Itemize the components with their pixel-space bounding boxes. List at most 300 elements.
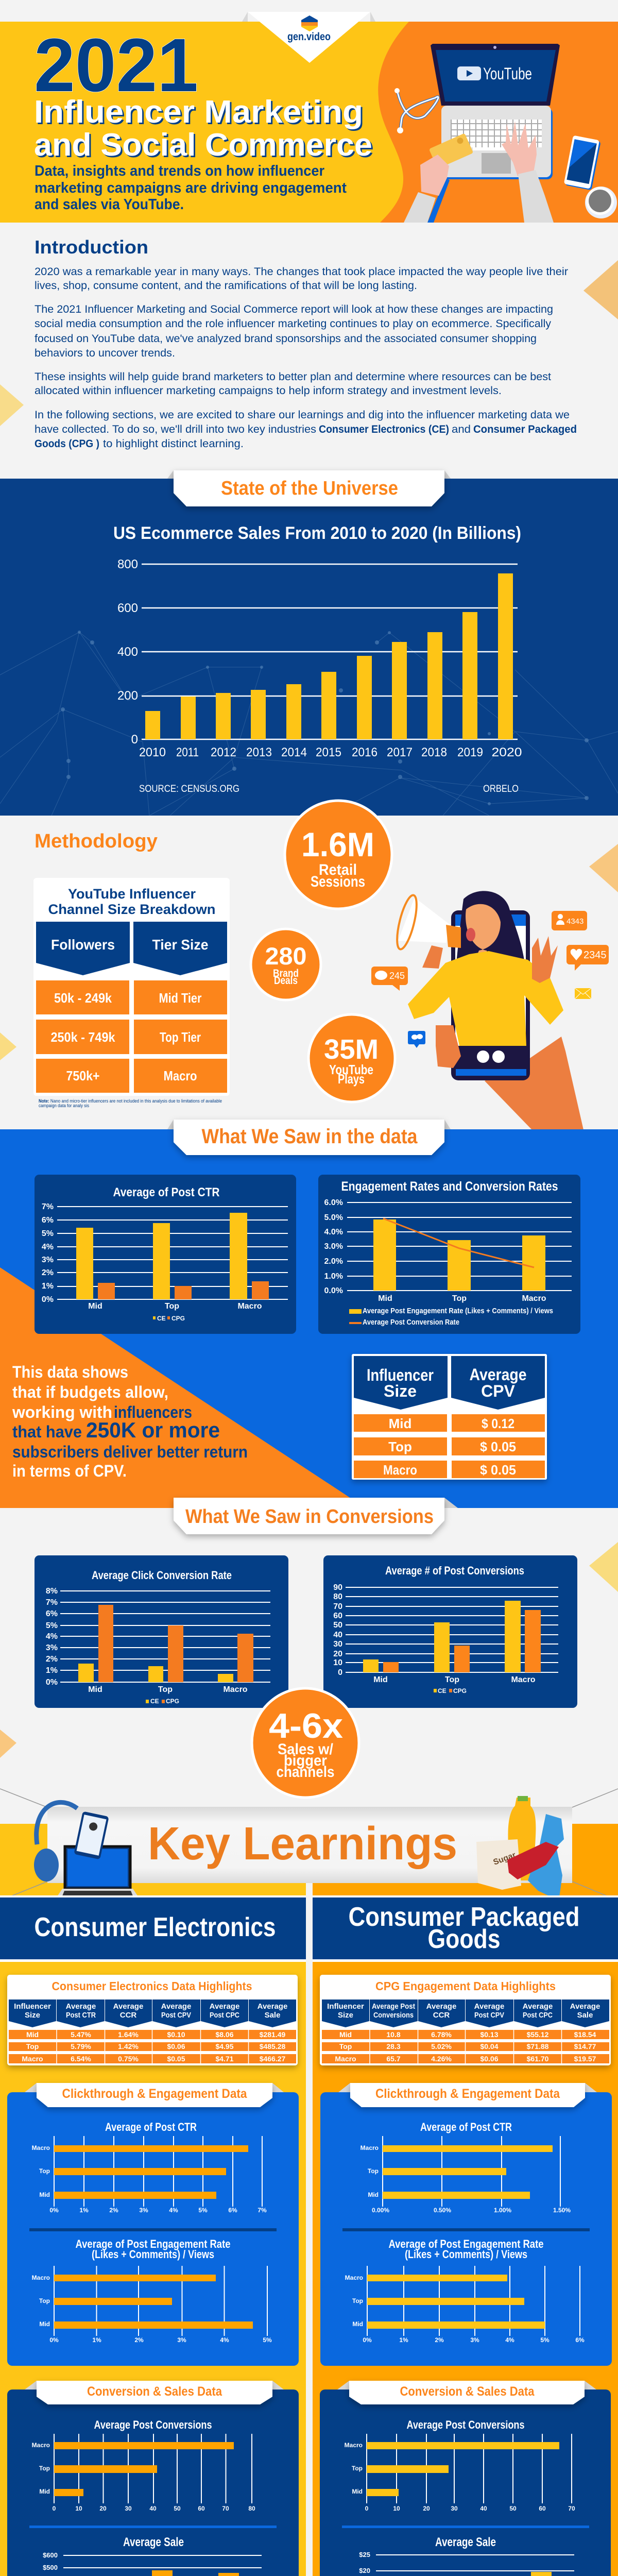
table: consumer electronics data highlights: $0.06 bbox=[167, 2042, 185, 2050]
illustration: laptop with YouTube bbox=[394, 44, 617, 223]
chart: US ecommerce sales: 0 bbox=[131, 733, 138, 747]
callout: this data shows: working with bbox=[12, 1403, 112, 1421]
logo ribbon bbox=[242, 12, 375, 63]
table: channel size breakdown: 250k - 749k bbox=[50, 1029, 115, 1045]
subtitle bbox=[35, 163, 347, 213]
illustration: laptop with YouTube: YouTube bbox=[483, 64, 532, 83]
chart: average click conversion rate: 1% bbox=[46, 1666, 58, 1675]
chart: average post conversions: Macro bbox=[32, 2442, 50, 2449]
table: consumer electronics data highlights: $8.06 bbox=[215, 2030, 234, 2039]
section tab: what we saw in conversions bbox=[160, 1498, 458, 1534]
section tab: what we saw in the data bbox=[167, 1120, 451, 1155]
chart: average of post CTR: 1% bbox=[79, 2207, 89, 2214]
title: influencer marketing bbox=[34, 94, 374, 164]
chart: average post conversions: 60 bbox=[539, 2505, 546, 2512]
footnote: Note: Nano and micro-tier influencers are not included in this analysis due to limitations of available bbox=[39, 1098, 222, 1104]
chart: average of post engagement rate: 5% bbox=[540, 2336, 550, 2344]
chart: average of post engagement rate: 0% bbox=[49, 2336, 59, 2344]
callout: this data shows: subscribers deliver better return bbox=[12, 1443, 248, 1461]
icon: 2345 tag: 2345 bbox=[583, 950, 607, 961]
chart: average post conversions bbox=[345, 2418, 575, 2512]
table: average CPV: Mid bbox=[389, 1416, 411, 1431]
chart: engagement and conversion rates: Macro bbox=[522, 1294, 546, 1303]
chart: average click conversion rate: 4% bbox=[46, 1632, 58, 1641]
table: CPG engagement data highlights: CCR bbox=[433, 2011, 450, 2020]
table: consumer electronics data highlights: Post CPV bbox=[161, 2011, 191, 2020]
hero banner bbox=[0, 12, 618, 223]
chart: engagement and conversion rates: 0.0% bbox=[324, 1286, 343, 1295]
callout: this data shows bbox=[12, 1363, 248, 1480]
table: channel size breakdown: Followers bbox=[51, 937, 115, 953]
chart: US ecommerce sales: 2014 bbox=[281, 745, 307, 759]
chart: US ecommerce sales: 800 bbox=[117, 557, 138, 571]
table: consumer electronics data highlights: Sale bbox=[265, 2011, 280, 2020]
intro text: have collected. To do so, we'll drill into two key industries bbox=[35, 423, 316, 435]
chart: average sale: Average Sale bbox=[123, 2535, 184, 2549]
stat: 1.6M retail sessions: Retail bbox=[319, 861, 357, 878]
chart: US ecommerce sales: 2016 bbox=[352, 745, 377, 759]
icon: sleeve left bbox=[404, 192, 436, 223]
chart: engagement and conversion rates: 4.0% bbox=[324, 1228, 343, 1236]
table: average CPV: $ 0.05 bbox=[480, 1462, 516, 1478]
chart: average post conversions: 50 bbox=[509, 2505, 517, 2512]
table: consumer electronics data highlights: $0.05 bbox=[167, 2055, 185, 2063]
chart: average of post CTR: Top bbox=[165, 1302, 179, 1311]
table: channel size breakdown: Channel Size Breakdown bbox=[48, 902, 215, 917]
intro text: to highlight distinct learning. bbox=[103, 438, 244, 450]
stat: 280 brand deals: Brand bbox=[273, 968, 299, 979]
chart: average post conversions: 20 bbox=[423, 2505, 430, 2512]
intro text: allocated within influencer marketing campaigns to help inform strategy and investment levels. bbox=[35, 385, 502, 397]
intro text: The 2021 Influencer Marketing and Social Commerce report will look at how these changes are impacting bbox=[35, 303, 553, 315]
table: consumer electronics data highlights: Post CPC bbox=[210, 2011, 239, 2020]
chart: average of post CTR: CPG bbox=[171, 1315, 185, 1322]
chart: average of post CTR: CE bbox=[157, 1315, 166, 1322]
chart: average of post CTR: 3% bbox=[139, 2207, 148, 2214]
section tab: Clickthrough & Engagement Data bbox=[375, 2087, 560, 2101]
chart: average of post CTR: Mid bbox=[368, 2191, 379, 2198]
chart: average of post engagement rate: Macro bbox=[345, 2274, 363, 2281]
chart: average post conversions: Macro bbox=[511, 1675, 536, 1684]
table: consumer electronics data highlights: Influencer bbox=[14, 2002, 51, 2011]
chart: average post conversions: Mid bbox=[39, 2488, 50, 2495]
chart: average of post CTR: 0.00% bbox=[372, 2207, 389, 2214]
title: influencer marketing: and Social Commerce bbox=[36, 129, 374, 164]
icon: 2345 tag bbox=[566, 945, 609, 971]
chart: US ecommerce sales: 2019 bbox=[457, 745, 483, 759]
chart: average of post engagement rate: Top bbox=[39, 2297, 50, 2304]
table: consumer electronics data highlights: Consumer Electronics Data Highlights bbox=[52, 1979, 252, 1993]
chart: average post conversions: CE bbox=[438, 1687, 447, 1694]
table: CPG engagement data highlights: Conversions bbox=[373, 2011, 414, 2020]
table: consumer electronics data highlights: $4.71 bbox=[215, 2055, 234, 2063]
table: channel size breakdown bbox=[33, 878, 230, 1096]
intro text: behaviors to uncover trends. bbox=[35, 347, 175, 359]
chart: average post conversions: Average # of Post Conversions bbox=[385, 1564, 524, 1577]
table: CPG engagement data highlights: $55.12 bbox=[527, 2030, 549, 2039]
chart: US ecommerce sales: 2013 bbox=[246, 745, 272, 759]
chart: average of post CTR: 7% bbox=[42, 1202, 54, 1211]
chart: average of post CTR: Macro bbox=[237, 1302, 262, 1311]
section tab: what we saw in the data: What We Saw in the data bbox=[202, 1125, 418, 1148]
callout: this data shows: influencers bbox=[114, 1403, 192, 1421]
callout: this data shows: This data shows bbox=[12, 1363, 128, 1381]
table: CPG engagement data highlights: Size bbox=[338, 2011, 353, 2020]
decoration: diamonds bbox=[0, 1542, 618, 1758]
table: consumer electronics data highlights: 0.75% bbox=[118, 2055, 139, 2063]
chart: average post conversions: Mid bbox=[352, 2488, 363, 2495]
callout: this data shows: that have bbox=[12, 1422, 82, 1441]
table: consumer electronics data highlights: $466.27 bbox=[260, 2055, 286, 2063]
chart: average of post CTR: 6% bbox=[228, 2207, 237, 2214]
panel: state of the universe bbox=[0, 470, 618, 816]
chart: engagement and conversion rates: Average Post Conversion Rate bbox=[363, 1318, 459, 1327]
chart: US ecommerce sales: 400 bbox=[117, 645, 138, 659]
table: channel size breakdown: Top Tier bbox=[160, 1029, 201, 1045]
illustration: woman with megaphone in phone bbox=[371, 891, 609, 1130]
chart: average of post CTR: Average of Post CTR bbox=[420, 2121, 512, 2133]
panel: introduction bbox=[35, 236, 577, 450]
chart: average post conversions: 80 bbox=[248, 2505, 255, 2512]
chart: average of post CTR bbox=[32, 2121, 267, 2214]
chart: average post conversions: 90 bbox=[333, 1583, 342, 1592]
table: consumer electronics data highlights: CCR bbox=[120, 2011, 136, 2020]
chart: average click conversion rate bbox=[35, 1555, 288, 1708]
table: channel size breakdown: YouTube Influencer bbox=[68, 886, 196, 902]
chart: average post conversions: 10 bbox=[333, 1658, 342, 1667]
panel: consumer electronics header: Consumer Electronics bbox=[34, 1912, 276, 1942]
section tab: Conversion & Sales Data bbox=[400, 2384, 535, 2399]
chart: average post conversions: Macro bbox=[345, 2442, 363, 2449]
table: CPG engagement data highlights: Influencer bbox=[327, 2002, 364, 2011]
stat: 280 brand deals bbox=[251, 929, 321, 1000]
heading: methodology: Methodology bbox=[35, 831, 158, 852]
table: consumer electronics data highlights: Top bbox=[26, 2042, 39, 2050]
subtitle: marketing campaigns are driving engagement bbox=[35, 180, 347, 196]
table: CPG engagement data highlights: CPG Engagement Data Highlights bbox=[375, 1979, 556, 1993]
chart: average sale: $600 bbox=[43, 2551, 58, 2559]
chart: US ecommerce sales: 2020 bbox=[491, 745, 522, 759]
chart: average post conversions: Top bbox=[39, 2465, 50, 2472]
table: CPG engagement data highlights: Post CPV bbox=[474, 2011, 504, 2020]
table: CPG engagement data highlights: Average bbox=[474, 2002, 504, 2011]
chart: average sale: $20 bbox=[359, 2567, 370, 2574]
chart: average click conversion rate: Mid bbox=[88, 1685, 102, 1694]
chart: US ecommerce sales: US Ecommerce Sales From 2010 to 2020 (In Billions) bbox=[113, 523, 521, 543]
chart: average of post CTR: 7% bbox=[258, 2207, 267, 2214]
chart: average of post engagement rate: (Likes + Comments) / Views bbox=[92, 2248, 214, 2261]
chart: average of post engagement rate: Macro bbox=[32, 2274, 50, 2281]
table: CPG engagement data highlights: 28.3 bbox=[386, 2042, 401, 2050]
table: average CPV: Macro bbox=[383, 1462, 417, 1478]
table: average CPV: $ 0.12 bbox=[482, 1416, 514, 1431]
icon: chat bbox=[408, 1031, 425, 1048]
chart: US ecommerce sales: 2012 bbox=[211, 745, 236, 759]
chart: engagement and conversion rates: 5.0% bbox=[324, 1213, 343, 1222]
chart: average sale: Average Sale bbox=[435, 2535, 496, 2549]
subtitle: and sales via YouTube. bbox=[35, 196, 184, 213]
chart: average of post CTR: 1% bbox=[42, 1282, 54, 1291]
chart: average post conversions bbox=[32, 2418, 255, 2512]
table: consumer electronics data highlights: Size bbox=[25, 2011, 40, 2020]
chart: average click conversion rate: 5% bbox=[46, 1621, 58, 1630]
chart: average of post CTR bbox=[35, 1175, 296, 1334]
chart: average post conversions: 70 bbox=[222, 2505, 229, 2512]
chart: average click conversion rate: 7% bbox=[46, 1598, 58, 1607]
table: CPG engagement data highlights: $18.54 bbox=[574, 2030, 596, 2039]
chart: engagement and conversion rates: 1.0% bbox=[324, 1272, 343, 1281]
chart: average post conversions: 50 bbox=[333, 1621, 342, 1630]
panel: CE clickthrough and engagement bbox=[7, 2083, 299, 2366]
chart: average of post CTR: 1.50% bbox=[553, 2207, 571, 2214]
table: average CPV: CPV bbox=[481, 1382, 516, 1400]
chart: engagement and conversion rates: 2.0% bbox=[324, 1257, 343, 1266]
chart: average post conversions: Average Post Conversions bbox=[94, 2418, 212, 2431]
chart: average post conversions: 60 bbox=[333, 1612, 342, 1620]
chart: average post conversions: Top bbox=[445, 1675, 459, 1684]
logo ribbon: gen.video bbox=[287, 31, 331, 43]
chart: average of post engagement rate: 6% bbox=[575, 2336, 585, 2344]
intro text: lives, shop, consume content, and the ramifications of that will be long lasting. bbox=[35, 280, 417, 292]
chart: engagement and conversion rates bbox=[318, 1175, 580, 1334]
chart: engagement and conversion rates: Average Post Engagement Rate (Likes + Comments) / Views bbox=[363, 1307, 553, 1315]
panel: CPG clickthrough and engagement bbox=[320, 2083, 612, 2366]
table: CPG engagement data highlights: $14.77 bbox=[574, 2042, 596, 2050]
chart: average of post CTR: Average of Post CTR bbox=[105, 2121, 197, 2133]
icon: credit card bbox=[429, 133, 473, 169]
table: consumer electronics data highlights: Mid bbox=[26, 2030, 39, 2039]
table: CPG engagement data highlights: 6.78% bbox=[431, 2030, 452, 2039]
chart: average post conversions: 10 bbox=[75, 2505, 82, 2512]
icon: smartphone bbox=[563, 135, 601, 190]
stat: 35M youtube plays: YouTube bbox=[329, 1062, 373, 1077]
footnote: campaign data for analy sis bbox=[39, 1103, 89, 1108]
table: CPG engagement data highlights: $0.06 bbox=[480, 2055, 499, 2063]
callout: this data shows: in terms of CPV. bbox=[12, 1462, 127, 1480]
stat: 280 brand deals: Deals bbox=[274, 975, 298, 987]
chart: average post conversions: 50 bbox=[174, 2505, 181, 2512]
table: channel size breakdown: 50k - 249k bbox=[54, 990, 112, 1006]
intro text: In the following sections, we are excited to share our learnings and dig into the influencer marketing data we bbox=[35, 409, 570, 421]
intro text bbox=[35, 266, 577, 450]
icon: hand right bbox=[502, 121, 537, 176]
stat: 4-6x sales: channels bbox=[276, 1764, 335, 1781]
chart: average of post CTR: 0% bbox=[42, 1295, 54, 1304]
table: CPG engagement data highlights: Average Post bbox=[372, 2002, 415, 2011]
icon: hand left bbox=[420, 155, 449, 196]
intro text: These insights will help guide brand marketers to better plan and determine where resources can be best bbox=[35, 371, 551, 383]
chart: average click conversion rate: Macro bbox=[223, 1685, 248, 1694]
table: average CPV: Influencer bbox=[367, 1366, 434, 1384]
chart: average post conversions: 20 bbox=[99, 2505, 107, 2512]
icon: 4343 tag bbox=[552, 911, 587, 930]
icon: mail bbox=[575, 988, 591, 999]
chart: average click conversion rate: 0% bbox=[46, 1678, 58, 1687]
table: consumer electronics data highlights: $281.49 bbox=[260, 2030, 286, 2039]
section tab: what we saw in conversions: What We Saw in Conversions bbox=[185, 1506, 434, 1528]
chart: average of post engagement rate: 1% bbox=[92, 2336, 101, 2344]
chart: average post conversions: 80 bbox=[333, 1592, 342, 1601]
chart: average of post CTR bbox=[360, 2121, 571, 2214]
table: CPG engagement data highlights: 10.8 bbox=[386, 2030, 401, 2039]
chart: US ecommerce sales: 200 bbox=[117, 689, 138, 703]
chart: average of post engagement rate: 5% bbox=[263, 2336, 272, 2344]
callout: this data shows: that if budgets allow, bbox=[12, 1383, 168, 1401]
table: channel size breakdown: 750k+ bbox=[66, 1068, 100, 1083]
chart: US ecommerce sales: 600 bbox=[117, 601, 138, 615]
chart: average of post CTR: 2% bbox=[109, 2207, 118, 2214]
chart: average of post CTR: 4% bbox=[42, 1243, 54, 1251]
callout: this data shows: 250K or more bbox=[86, 1418, 220, 1442]
icon: 245 tag bbox=[371, 967, 408, 991]
icon: consumer goods: Sugar bbox=[492, 1851, 517, 1867]
icon: megaphone bbox=[393, 893, 461, 969]
footnote bbox=[39, 1098, 222, 1108]
chart: average post conversions: CPG bbox=[453, 1687, 467, 1694]
table: CPG engagement data highlights: $19.57 bbox=[574, 2055, 596, 2063]
table: consumer electronics data highlights: $0.10 bbox=[167, 2030, 185, 2039]
chart: average click conversion rate: Average Click Conversion Rate bbox=[92, 1569, 232, 1582]
chart: average of post CTR: 6% bbox=[42, 1216, 54, 1225]
table: CPG engagement data highlights: Top bbox=[339, 2042, 352, 2050]
intro text: and bbox=[452, 423, 471, 435]
stat: 4-6x sales: bigger bbox=[284, 1752, 327, 1769]
chart: US ecommerce sales: ORBELO bbox=[483, 784, 519, 794]
chart: average of post CTR: Macro bbox=[360, 2144, 379, 2151]
stat: 4-6x sales: Sales w/ bbox=[278, 1741, 334, 1758]
title: influencer marketing: Influencer Marketing bbox=[34, 94, 363, 130]
chart: average post conversions: 10 bbox=[393, 2505, 400, 2512]
chart: average of post engagement rate: 3% bbox=[177, 2336, 186, 2344]
chart: US ecommerce sales: 2011 bbox=[176, 745, 199, 759]
intro text: Goods (CPG ) bbox=[35, 438, 99, 450]
table: CPG engagement data highlights: 5.02% bbox=[431, 2042, 452, 2050]
panel: CPG conversion and sales bbox=[320, 2381, 611, 2576]
chart: average post conversions: 40 bbox=[333, 1631, 342, 1639]
table: average CPV: $ 0.05 bbox=[480, 1439, 516, 1454]
table: consumer electronics data highlights: 5.47% bbox=[71, 2030, 91, 2039]
table: average CPV: Top bbox=[388, 1439, 412, 1454]
chart: US ecommerce sales: 2017 bbox=[387, 745, 413, 759]
chart: average of post CTR: 5% bbox=[42, 1229, 54, 1238]
intro text: focused on YouTube data, we've analyzed brand sponsorships and the associated consumer shopping bbox=[35, 333, 537, 345]
panel: consumer packaged goods header bbox=[313, 1895, 618, 1962]
icon: 4343 tag: 4343 bbox=[566, 917, 583, 926]
table: consumer electronics data highlights bbox=[7, 1975, 298, 2065]
chart: average sale: $25 bbox=[359, 2551, 370, 2558]
table: consumer electronics data highlights: $485.28 bbox=[260, 2042, 286, 2050]
chart: average post conversions: 70 bbox=[568, 2505, 575, 2512]
chart: average post conversions: 20 bbox=[333, 1650, 342, 1658]
chart: average of post CTR: Macro bbox=[32, 2144, 50, 2151]
heading: introduction: Introduction bbox=[35, 236, 148, 258]
table: CPG engagement data highlights: $0.04 bbox=[480, 2042, 499, 2050]
table: consumer electronics data highlights: Average bbox=[161, 2002, 191, 2011]
intro text: Consumer Electronics (CE) bbox=[319, 423, 449, 435]
table: CPG engagement data highlights: Sale bbox=[577, 2011, 593, 2020]
intro text: social media consumption and the role influencer marketing continues to play on ecommerce. Specifically bbox=[35, 318, 552, 330]
panel: key learnings backgrounds bbox=[0, 1824, 618, 2576]
chart: average click conversion rate: 3% bbox=[46, 1643, 58, 1652]
table: CPG engagement data highlights bbox=[320, 1975, 611, 2065]
chart: average of post CTR: 1.00% bbox=[494, 2207, 511, 2214]
chart: average post conversions: 0 bbox=[53, 2505, 56, 2512]
chart: average post conversions: Top bbox=[352, 2465, 363, 2472]
table: consumer electronics data highlights: Average bbox=[113, 2002, 143, 2011]
decoration: diamonds bbox=[0, 844, 618, 1060]
panel: consumer packaged goods header: Goods bbox=[427, 1924, 501, 1954]
stat: 280 brand deals: 280 bbox=[265, 942, 307, 970]
chart: average click conversion rate: 2% bbox=[46, 1655, 58, 1664]
chart: average of post engagement rate: Average of Post Engagement Rate bbox=[388, 2238, 544, 2250]
table: CPG engagement data highlights: Macro bbox=[335, 2055, 356, 2063]
title: influencer marketing: and Social Commerce bbox=[34, 127, 372, 163]
icon: coffee cup bbox=[585, 187, 617, 218]
chart: engagement and conversion rates: Top bbox=[452, 1294, 467, 1303]
section tab: state of the universe bbox=[167, 470, 451, 506]
banner: key learnings: Key Learnings bbox=[148, 1818, 457, 1870]
intro text: Consumer Packaged bbox=[473, 423, 577, 435]
chart: average of post engagement rate: 3% bbox=[470, 2336, 479, 2344]
chart: average click conversion rate: CPG bbox=[166, 1698, 179, 1705]
chart: average of post CTR: 5% bbox=[198, 2207, 208, 2214]
intro text: 2020 was a remarkable year in many ways. The changes that took place impacted the way people live their bbox=[35, 266, 568, 278]
title: influencer marketing: Influencer Marketing bbox=[36, 96, 365, 131]
section tab bbox=[337, 2381, 596, 2404]
chart: average of post CTR: Mid bbox=[88, 1302, 102, 1311]
chart: average of post engagement rate: 0% bbox=[363, 2336, 372, 2344]
chart: average post conversions: Mid bbox=[373, 1675, 388, 1684]
table: CPG engagement data highlights: Average bbox=[426, 2002, 456, 2011]
chart: average of post engagement rate: 4% bbox=[505, 2336, 514, 2344]
chart: average of post engagement rate: Mid bbox=[39, 2320, 50, 2328]
chart: average of post engagement rate: 2% bbox=[134, 2336, 144, 2344]
chart: average post conversions: 40 bbox=[480, 2505, 487, 2512]
table: CPG engagement data highlights: $0.13 bbox=[480, 2030, 499, 2039]
stat: 4-6x sales bbox=[252, 1688, 359, 1798]
chart: average post conversions: 70 bbox=[333, 1602, 342, 1611]
table: CPG engagement data highlights: Average bbox=[523, 2002, 553, 2011]
chart: average of post engagement rate: 1% bbox=[399, 2336, 408, 2344]
chart: US ecommerce sales: 2018 bbox=[421, 745, 447, 759]
table: consumer electronics data highlights: 1.64% bbox=[118, 2030, 139, 2039]
chart: average click conversion rate: 8% bbox=[46, 1587, 58, 1596]
chart: US ecommerce sales bbox=[113, 523, 522, 794]
stat: 4-6x sales: 4-6x bbox=[269, 1706, 343, 1745]
chart: US ecommerce sales: 2015 bbox=[316, 745, 341, 759]
table: consumer electronics data highlights: 6.54% bbox=[71, 2055, 91, 2063]
chart: average post conversions: 30 bbox=[333, 1640, 342, 1649]
chart: average of post engagement rate: (Likes + Comments) / Views bbox=[405, 2248, 527, 2261]
chart: engagement and conversion rates: Engagement Rates and Conversion Rates bbox=[341, 1179, 558, 1194]
chart: average of post CTR: 2% bbox=[42, 1268, 54, 1277]
chart: average post conversions: Average Post Conversions bbox=[407, 2418, 524, 2431]
table: consumer electronics data highlights: Average bbox=[258, 2002, 287, 2011]
table: channel size breakdown: Tier Size bbox=[152, 937, 208, 953]
table: CPG engagement data highlights: 65.7 bbox=[386, 2055, 401, 2063]
chart: average click conversion rate: CE bbox=[150, 1698, 159, 1705]
chart: average of post engagement rate: 2% bbox=[435, 2336, 444, 2344]
chart: engagement and conversion rates: 3.0% bbox=[324, 1242, 343, 1251]
table: CPG engagement data highlights: 4.26% bbox=[431, 2055, 452, 2063]
chart: average of post engagement rate bbox=[345, 2238, 585, 2344]
section tab: Clickthrough & Engagement Data bbox=[62, 2087, 247, 2101]
stat: 35M youtube plays bbox=[308, 1014, 395, 1102]
chart: average click conversion rate: 6% bbox=[46, 1609, 58, 1618]
icon: sleeve right bbox=[518, 170, 554, 223]
chart: average of post CTR: 0% bbox=[49, 2207, 59, 2214]
icon: 245 tag: 245 bbox=[389, 971, 405, 981]
